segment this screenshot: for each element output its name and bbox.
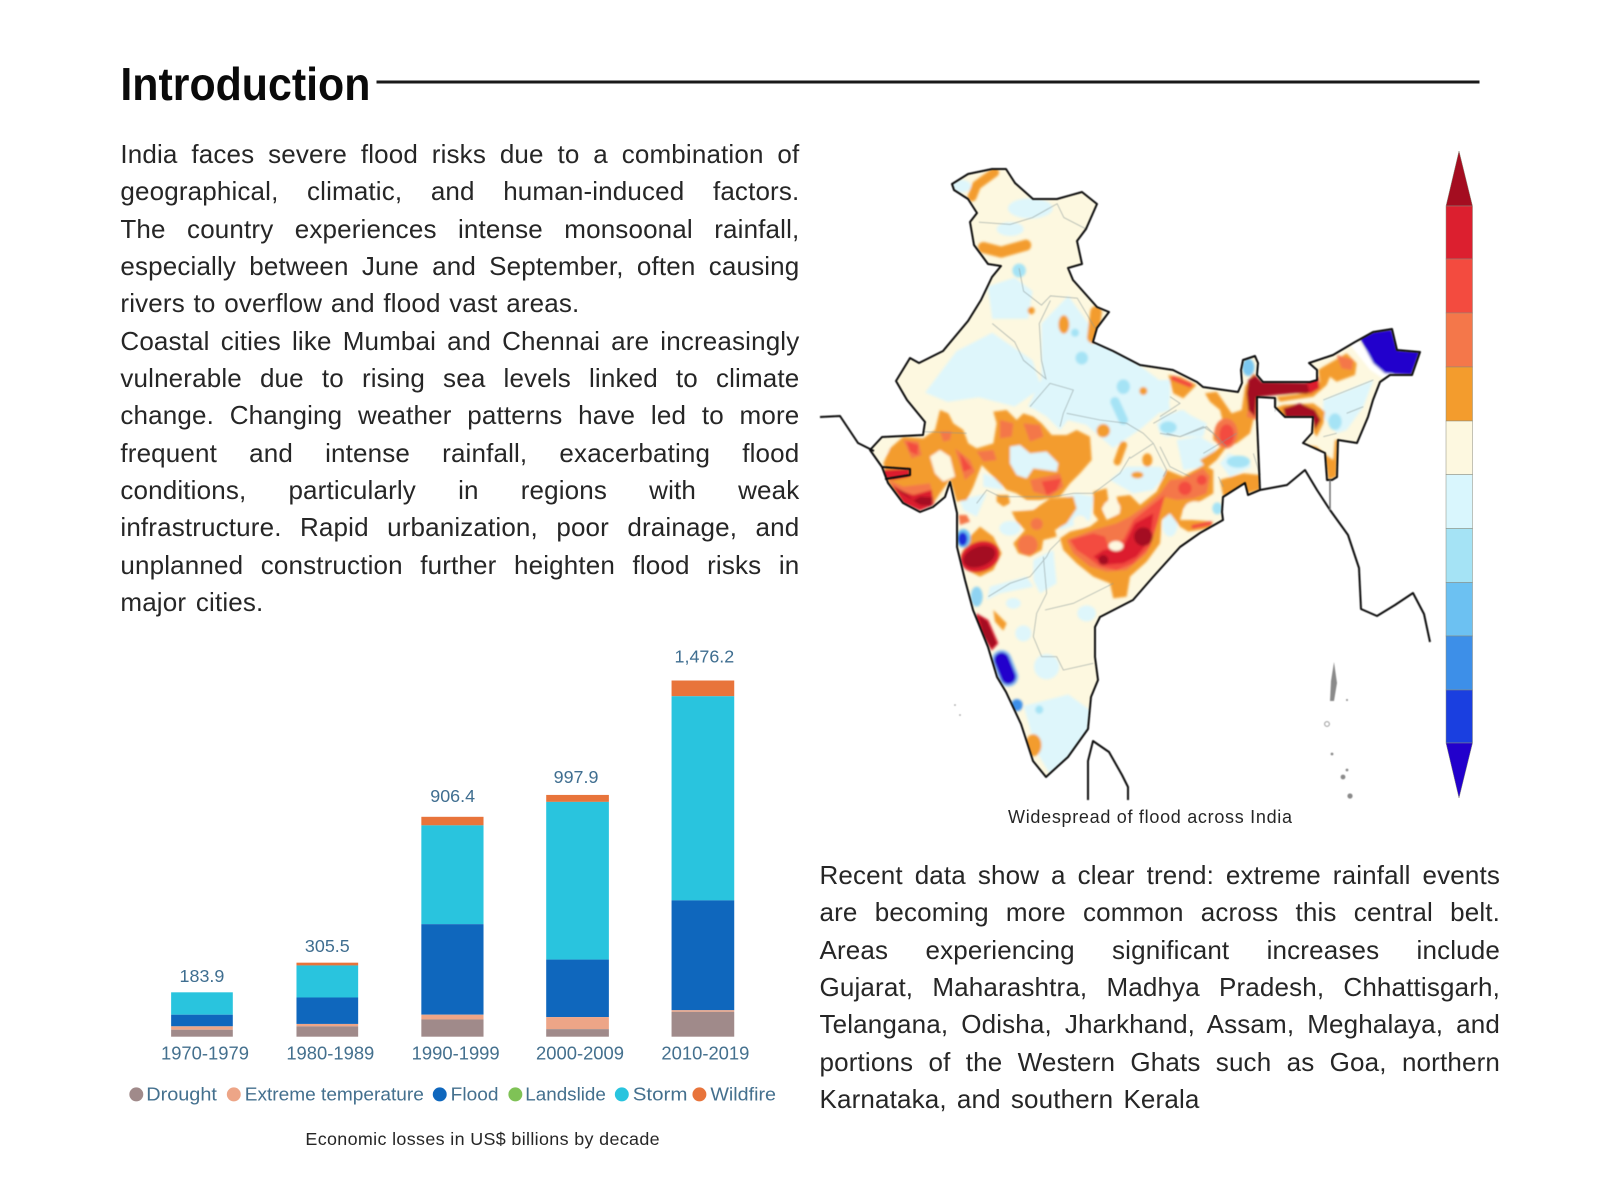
decade labels (161, 1043, 749, 1064)
text block: flood risks: infrastructure. Rapid urbanization, poor drainage, and (120, 512, 799, 542)
text block: flood risks: major cities. (120, 587, 263, 617)
map caption: Widespread of flood across India (1008, 807, 1293, 827)
text block: recent data: Telangana, Odisha, Jharkhand, Assam, Meghalaya, and (820, 1009, 1500, 1039)
bar: 1990-1999 (421, 817, 484, 1037)
text block: recent data: are becoming more common across this central belt. (820, 897, 1500, 927)
text block: flood risks: The country experiences intense monsoonal rainfall, (120, 214, 799, 244)
legend: Landslide (525, 1084, 606, 1105)
title (120, 58, 1480, 110)
map outline (820, 169, 1430, 800)
bar: 1970-1979 (171, 992, 233, 1037)
bar: 2000-2009 (546, 795, 609, 1037)
text block: flood risks: especially between June and September, often causing (120, 251, 799, 281)
decade labels: 1990-1999 (412, 1043, 500, 1064)
value labels: 906.4 (430, 786, 475, 806)
text block: flood risks: rivers to overflow and flood vast areas. (120, 288, 579, 318)
colour scale bar (1446, 151, 1472, 798)
decade labels: 1980-1989 (286, 1043, 374, 1064)
north-east patches (1160, 329, 1420, 497)
text block: recent data: portions of the Western Ghats such as Goa, northern (820, 1046, 1500, 1076)
legend: Extreme temperature (245, 1084, 424, 1105)
text block: flood risks (120, 139, 800, 617)
legend: Wildfire (710, 1084, 776, 1105)
text block: recent data: Recent data show a clear trend: extreme rainfall events (820, 860, 1500, 890)
decade labels: 2010-2019 (661, 1043, 749, 1064)
chart caption: Economic losses in US$ billions by decade (305, 1129, 660, 1149)
text block: recent data: Karnataka, and southern Kerala (820, 1084, 1200, 1114)
text block: flood risks: geographical, climatic, and human-induced factors. (120, 176, 799, 206)
legend: Storm (633, 1084, 687, 1105)
text block: flood risks: change. Changing weather patterns have led to more (120, 400, 799, 430)
text block: flood risks: frequent and intense rainfall, exacerbating flood (120, 438, 799, 468)
text block: recent data: Areas experiencing significant increases include (820, 935, 1500, 965)
legend: Flood (451, 1084, 498, 1105)
islands (954, 662, 1353, 799)
bar: 2010-2019 (672, 681, 734, 1037)
value labels: 1,476.2 (675, 647, 734, 667)
central and peninsular patches (871, 379, 1250, 679)
text block: flood risks: unplanned construction further heighten flood risks in (120, 550, 799, 580)
text block: recent data (820, 860, 1500, 1114)
text block: flood risks: India faces severe flood risks due to a combination of (120, 139, 799, 169)
legend (129, 1084, 776, 1105)
value labels (180, 647, 734, 986)
value labels: 305.5 (305, 936, 350, 956)
legend: Drought (146, 1084, 218, 1105)
decade labels: 2000-2009 (536, 1043, 624, 1064)
bar chart: economic losses (129, 647, 776, 1149)
text block: recent data: Gujarat, Maharashtra, Madhya Pradesh, Chhattisgarh, (820, 972, 1500, 1002)
text block: flood risks: Coastal cities like Mumbai and Chennai are increasingly (120, 326, 799, 356)
decade labels: 1970-1979 (161, 1043, 249, 1064)
map fill (870, 169, 1420, 777)
bar: 1980-1989 (296, 963, 358, 1037)
map: flood across India (819, 151, 1473, 801)
title: Introduction (120, 58, 370, 110)
text block: flood risks: vulnerable due to rising sea levels linked to climate (120, 363, 799, 393)
value labels: 997.9 (554, 767, 598, 787)
value labels: 183.9 (180, 966, 224, 986)
north and south patches (925, 172, 1167, 775)
state borders (923, 204, 1373, 670)
text block: flood risks: conditions, particularly in regions with weak (120, 475, 799, 505)
